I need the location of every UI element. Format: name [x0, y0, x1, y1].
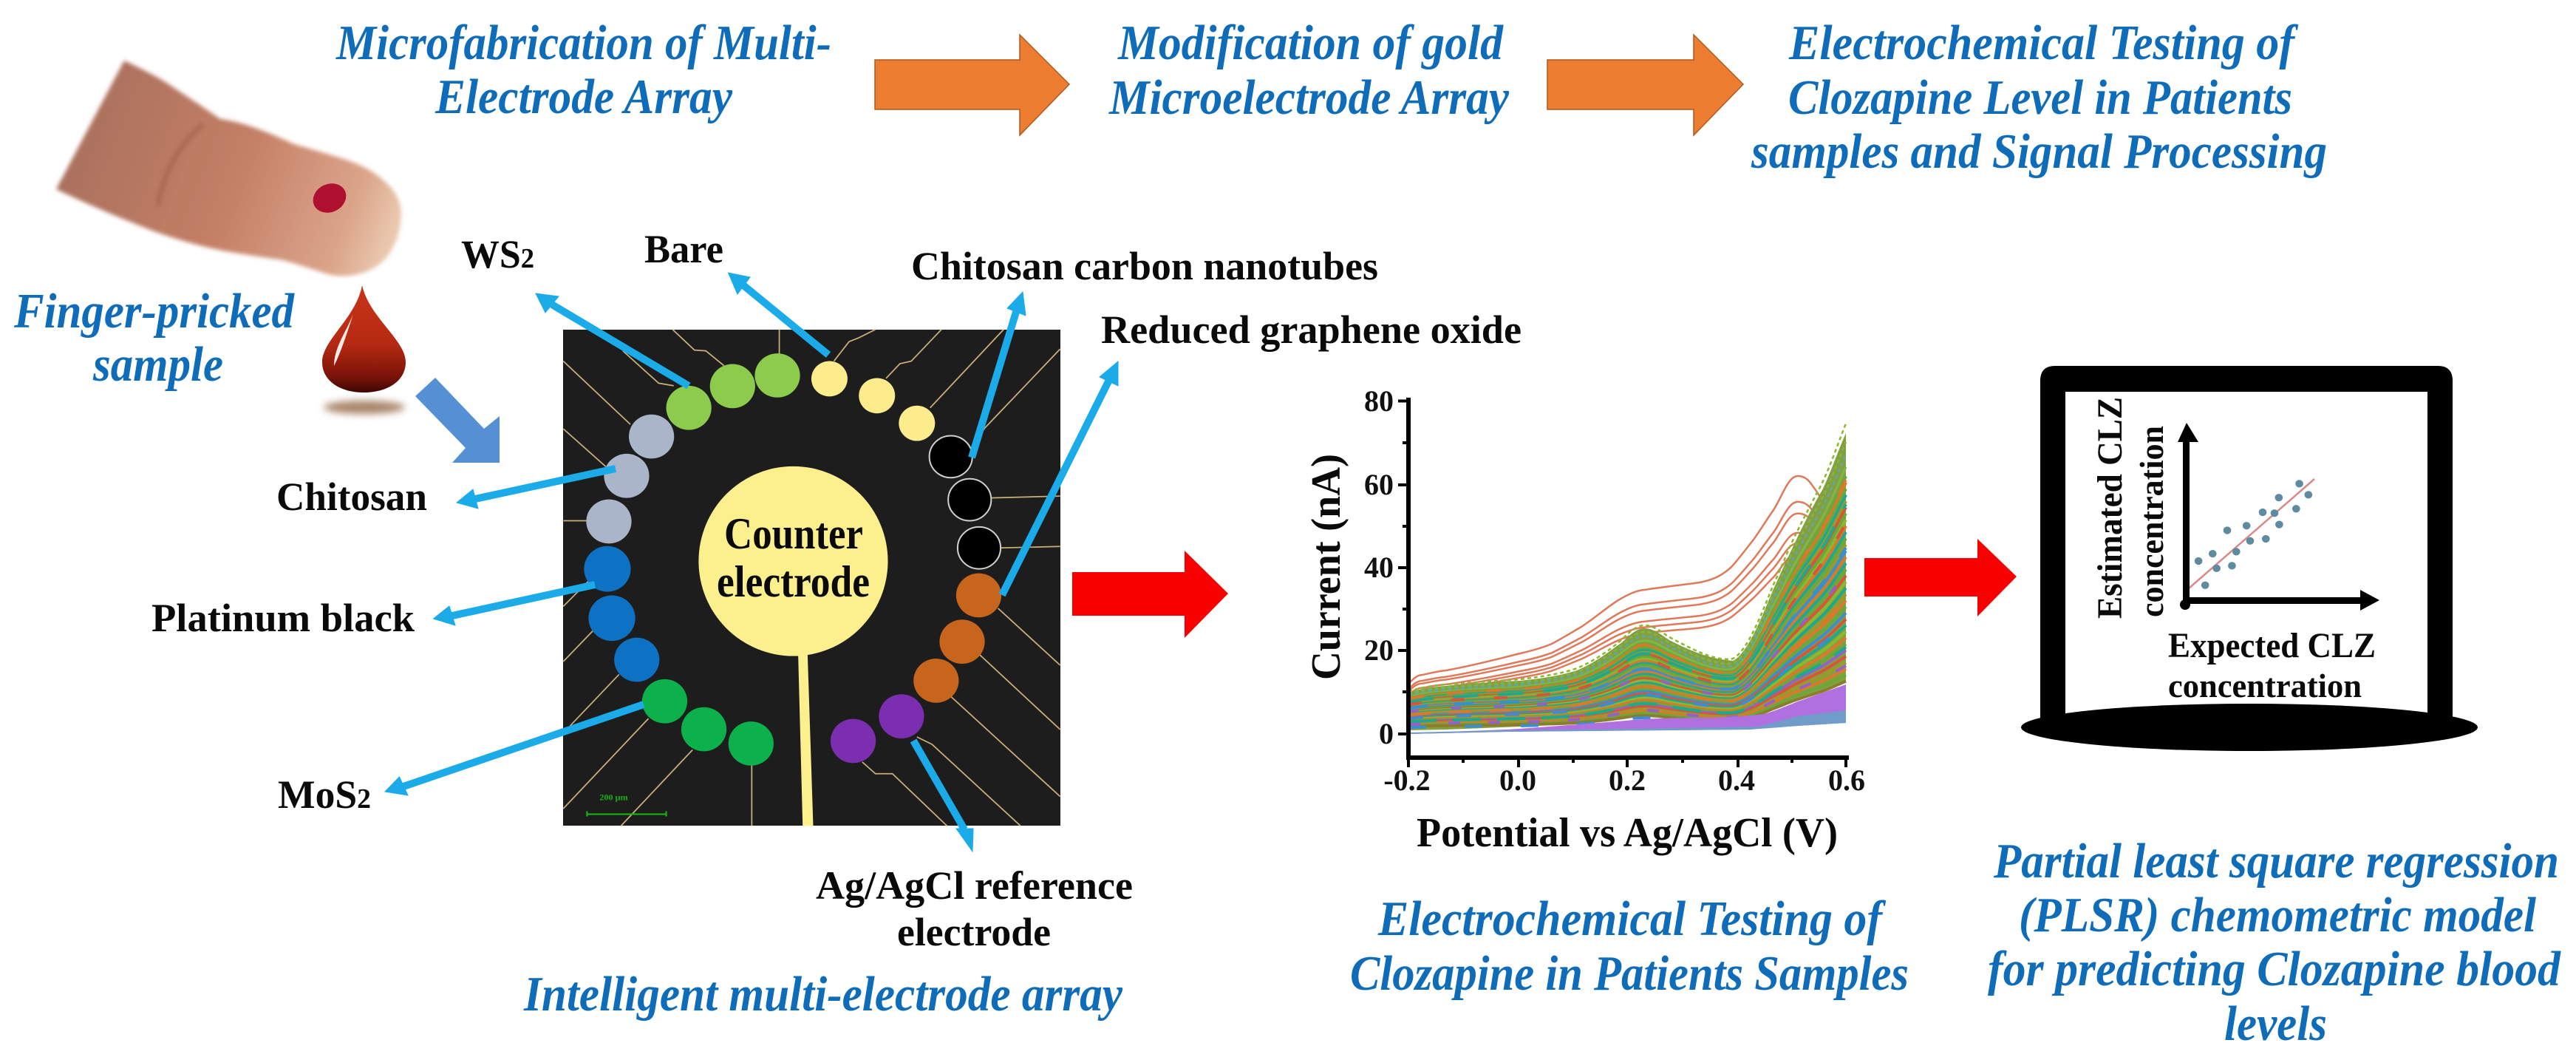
label: Finger-pricked sample: Finger-pricked: [13, 284, 295, 339]
label: Ag/AgCl reference electrode: Ag/AgCl reference: [816, 863, 1133, 908]
x axis label: [2168, 626, 2376, 704]
y axis label: [2091, 397, 2170, 619]
electrodes: MoS2: [642, 679, 774, 766]
caption: Electrochemical Testing of Clozapine in Patients Samples: Electrochemical Testing of: [1377, 891, 1886, 946]
y tick labels: 40: [1364, 551, 1394, 584]
caption: Electrochemical Testing of Clozapine in Patients Samples: [1350, 891, 1909, 1001]
chart: current vs potential voltammograms: [1304, 384, 1865, 856]
x tick labels: 0.6: [1828, 764, 1865, 797]
caption: Electrochemical Testing of Clozapine in Patients Samples: Clozapine in Patients Samples: [1350, 946, 1909, 1001]
electrodes: chitosan: [586, 415, 674, 543]
label: Ag/AgCl reference electrode: electrode: [897, 910, 1051, 954]
label: Chitosan: Chitosan: [276, 475, 427, 519]
label: Finger-pricked sample: [13, 284, 295, 392]
mottled overlay curves: [1408, 480, 1846, 727]
electrodes: WS2: [667, 353, 800, 430]
top orange-red curves: [1408, 476, 1825, 699]
label: Chitosan carbon nanotubes: Chitosan carbon nanotubes: [911, 244, 1378, 288]
scale bar: 200 μm: [599, 792, 628, 803]
image: finger with blood prick: [56, 61, 401, 276]
arrow: red arrow to chart: [1072, 551, 1228, 638]
panel: electrode array board: [563, 330, 1060, 826]
heading: Modification of gold Microelectrode Array: Microelectrode Array: [1108, 70, 1509, 125]
electrodes: bare: [811, 361, 935, 441]
heading: Modification of gold Microelectrode Array: Modification of gold: [1117, 16, 1504, 70]
heading: Electrochemical Testing of Clozapine Level: Clozapine Level in Patients: [1788, 70, 2292, 125]
arrow: orange step 2: [1547, 35, 1743, 135]
icon: blood drop: [322, 285, 406, 414]
heading: Microfabrication of Multi-Electrode Array: [335, 16, 831, 124]
dense curve family: [1408, 424, 1846, 727]
panel: laptop with regression plot: [2021, 366, 2478, 751]
heading: Microfabrication of Multi-Electrode Array: Microfabrication of Multi-: [335, 16, 831, 70]
plot axes: [2178, 423, 2379, 611]
electrodes: reduced graphene oxide: [913, 574, 1001, 703]
heading: Modification of gold Microelectrode Array: [1108, 16, 1509, 125]
x tick labels: -0.2: [1383, 764, 1431, 797]
electrodes: platinum black: [584, 546, 659, 682]
arrow: blue block arrow to the electrode array: [415, 378, 500, 463]
label: Reduced graphene oxide: Reduced graphene oxide: [1101, 307, 1522, 352]
arrow: Reduced graphene oxide pointer: [1002, 361, 1118, 595]
y axis label: concentration: [2133, 426, 2170, 617]
x axis label: concentration: [2168, 667, 2362, 704]
x tick labels: 0.4: [1718, 764, 1755, 797]
caption: Partial least square regression model: [1988, 834, 2561, 1051]
arrow: Chitosan carbon nanotubes pointer: [972, 292, 1026, 458]
label: Bare: Bare: [644, 227, 723, 271]
heading: Microfabrication of Multi-Electrode Array: Electrode Array: [435, 69, 732, 124]
label: Counter electrode: [717, 509, 870, 606]
x axis title: Potential vs Ag/AgCl (V): [1417, 810, 1838, 856]
label: Platinum black: Platinum black: [151, 596, 415, 640]
y tick labels: 60: [1364, 468, 1394, 501]
caption: Intelligent multi-electrode array: Intelligent multi-electrode array: [523, 967, 1122, 1022]
scatter points: [2195, 480, 2312, 589]
scale bar: [587, 792, 667, 816]
blue base band: [1408, 710, 1846, 734]
arrow: MoS2 pointer: [385, 704, 644, 795]
label: Ag/AgCl reference electrode: [816, 863, 1133, 954]
chart axes: [1398, 398, 1849, 767]
purple low-signal band: [1408, 684, 1846, 734]
arrow: Bare pointer: [729, 273, 828, 355]
heading: Electrochemical Testing of Clozapine Level: [1751, 16, 2327, 179]
label: MoS2: MoS2: [278, 772, 371, 817]
arrow: Chitosan pointer: [457, 469, 616, 509]
regression line: [2189, 479, 2314, 588]
label: Counter electrode: electrode: [717, 557, 870, 606]
arrow: red arrow to laptop: [1864, 539, 2017, 616]
electrodes: Ag/AgCl reference: [831, 694, 924, 763]
chart: gold traces and electrodes: [563, 330, 1060, 826]
arrow: orange step 1: [875, 35, 1069, 135]
label: Counter electrode: Counter: [724, 509, 863, 558]
label: Finger-pricked sample: sample: [92, 337, 223, 392]
y tick labels: 80: [1364, 384, 1394, 418]
y tick labels: [1364, 384, 1394, 750]
y axis title: Current (nA): [1304, 454, 1349, 680]
counter electrode stem: [798, 654, 814, 826]
x tick labels: [1383, 764, 1865, 797]
caption: Partial least square regression model: levels: [2224, 996, 2327, 1051]
y axis label: Estimated CLZ: [2091, 397, 2130, 619]
caption: Partial least square regression model: (PLSR) chemometric model: [2019, 888, 2536, 942]
x axis label: Expected CLZ: [2168, 626, 2376, 665]
arrow: WS2 pointer: [536, 293, 689, 386]
heading: Electrochemical Testing of Clozapine Level: Electrochemical Testing of: [1788, 16, 2298, 70]
y tick labels: 20: [1364, 633, 1394, 667]
counter electrode disc: [698, 466, 888, 656]
electrodes: chitosan carbon nanotubes: [930, 436, 1001, 569]
heading: Electrochemical Testing of Clozapine Level: samples and Signal Processing: [1751, 124, 2327, 179]
arrow: Ag/AgCl pointer: [913, 741, 973, 852]
dense band base: [1408, 433, 1846, 730]
x tick labels: 0.0: [1499, 764, 1536, 797]
arrow: Platinum black pointer: [433, 585, 595, 625]
laptop base: [2021, 704, 2478, 751]
laptop screen frame: [2040, 366, 2453, 732]
x tick labels: 0.2: [1609, 764, 1646, 797]
label: WS2: WS2: [461, 232, 534, 276]
y tick labels: 0: [1379, 717, 1394, 750]
